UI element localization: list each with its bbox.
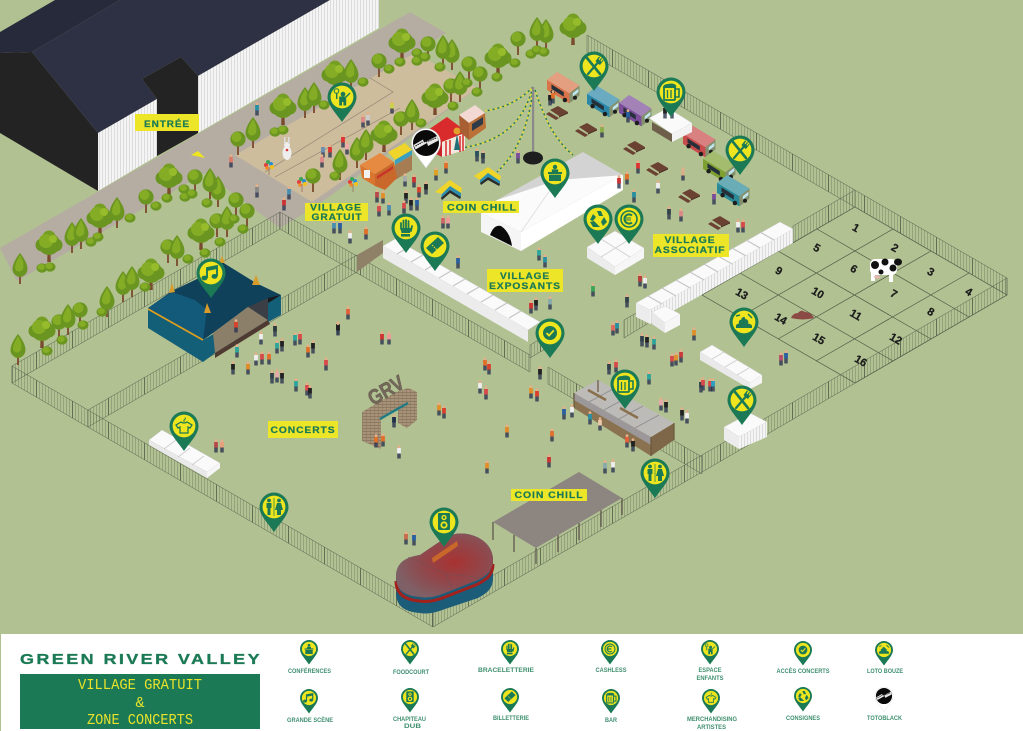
legend: bar: BAR [605,718,618,724]
legend: merchandising: ARTISTES [697,725,726,731]
white tents: merchandising [149,430,220,478]
lot numbers: 11 [847,307,864,324]
lot numbers: 6 [848,263,859,276]
road [0,12,478,281]
white tents: exposants [383,239,540,342]
map pins [170,52,758,547]
lot numbers: 2 [889,242,900,255]
zone labels: EXPOSANTS [489,281,561,291]
legend: concert access: ACCÈS CONCERTS [776,667,830,675]
zone box: & [135,695,145,712]
cow [870,258,902,282]
lot numbers: 4 [963,286,975,300]
legend: merchandising [687,689,737,731]
lot numbers: 3 [925,266,936,279]
yellow chill benches [435,167,501,200]
gate [357,240,383,272]
lot numbers: 1 [850,222,861,235]
legend: foodcourt [393,640,429,676]
bar with roofs [574,380,674,456]
white tents: loto [700,345,762,389]
zone labels: VILLAGE [664,235,716,245]
cow pile [791,311,814,320]
legend: kids area: ENFANTS [696,676,724,682]
trees [10,14,586,365]
legend: bracelets: BRACELETTERIE [478,668,534,674]
zone labels: CONCERTS [270,425,336,435]
main stage [148,256,281,362]
legend: totoblack [867,687,903,722]
white tents: associatif [636,222,793,333]
zone labels: COIN CHILL [447,202,517,212]
stalls and circus tent [360,105,486,190]
plaza [235,53,478,202]
lot numbers: 13 [733,286,750,303]
legend: lockers [786,687,820,722]
zone labels: ASSOCIATIF [654,245,726,255]
lot numbers: 5 [811,242,822,255]
zone box [20,674,260,729]
lot numbers: 16 [852,353,869,370]
white tents: foodcourt [724,413,767,449]
dub stage [396,534,493,614]
food truck tent [649,108,692,142]
legend: lockers: CONSIGNES [786,716,820,722]
legend: cashless: CASHLESS [596,668,626,674]
mascot and balloons [264,137,358,192]
lot numbers: 10 [809,285,826,302]
zone labels [135,114,729,501]
white tents: consignes [587,231,644,275]
lot numbers [733,222,975,370]
legend: foodcourt: FOODCOURT [393,670,429,676]
conference tent [481,152,623,251]
yellow arrow [191,151,205,158]
GRV arch [362,371,417,449]
zone labels: VILLAGE [310,202,362,212]
legend title: GREEN RIVER VALLEY [20,651,262,668]
maypole with garlands [462,87,573,172]
lot grid [702,207,1007,383]
legend: dub stage: CHAPITEAU [393,717,426,723]
legend: loto bouze [867,641,903,675]
legend panel [1,634,1023,731]
lot numbers: 15 [810,331,827,348]
zone labels: GRATUIT [312,212,362,222]
legend: cashless [596,640,626,674]
legend: kids area [696,640,724,682]
zone labels: COIN CHILL [514,490,584,500]
lot numbers: 14 [772,311,790,328]
picnic tables [546,106,730,230]
legend: dub stage: DUB [404,724,422,730]
legend: kids area: ESPACE [698,668,722,674]
zone box: ZONE CONCERTS [87,712,193,729]
lot numbers: 9 [773,265,784,278]
legend: conferences: CONFÉRENCES [288,667,331,675]
legend: concert access [776,641,830,675]
festival goers [214,90,788,545]
food trucks [547,72,749,206]
legend: loto bouze: LOTO BOUZE [867,669,903,675]
legend: bracelets [478,640,534,674]
lot numbers: 8 [925,306,936,319]
GRV arch: GRV [364,371,408,410]
legend: conferences [288,640,331,675]
legend: dub stage [393,688,426,730]
legend: merchandising: MERCHANDISING [687,717,737,723]
zone box: VILLAGE GRATUIT [78,677,202,694]
legend: main stage [287,689,333,724]
entrance building [0,0,379,191]
zone labels: VILLAGE [500,271,550,281]
coin chill canopy [493,472,622,564]
zone labels: ENTRÉE [144,119,190,129]
fences [12,35,1007,627]
legend: totoblack: TOTOBLACK [867,716,903,722]
legend: ticket office: BILLETTERIE [493,716,529,722]
lot numbers: 12 [887,331,904,348]
lot numbers: 7 [888,288,899,301]
legend: main stage: GRANDE SCÈNE [287,716,333,724]
legend: bar [602,689,620,724]
legend: ticket office [493,688,529,722]
